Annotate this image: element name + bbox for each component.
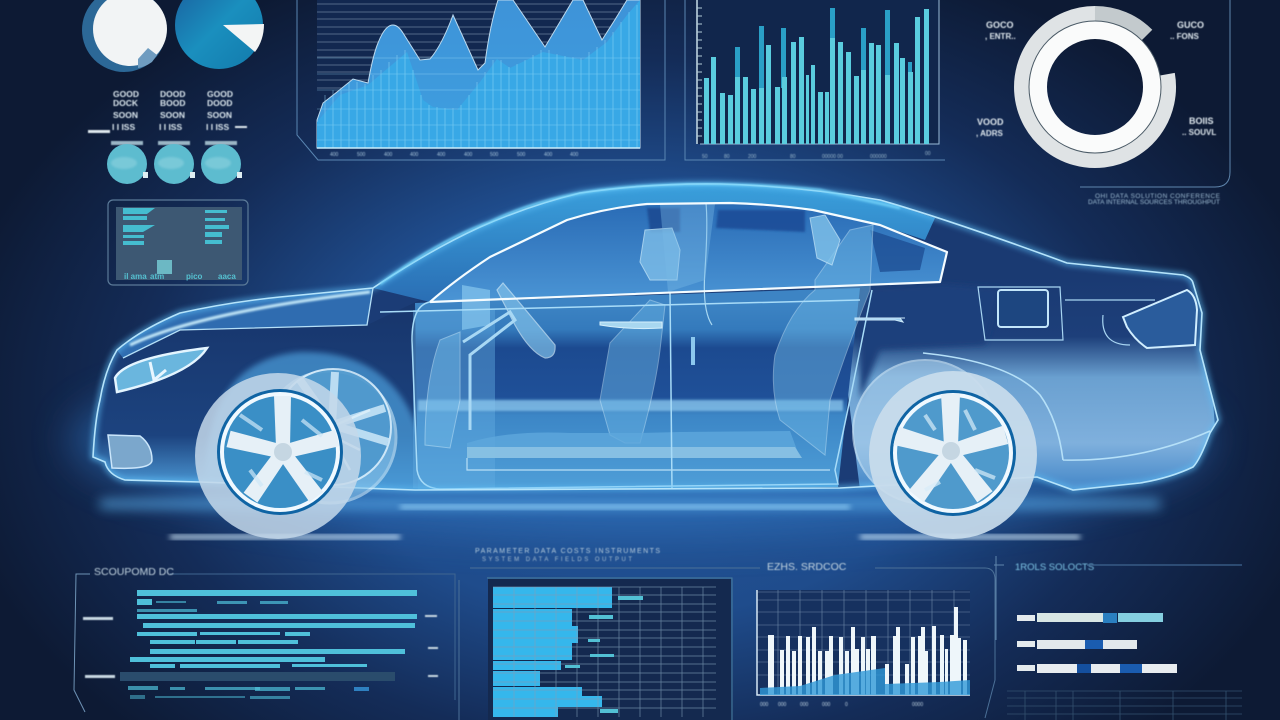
text: three-column labels above spheres: DOCK [113,98,139,108]
panel: small data screen: aaca [218,272,236,281]
chart: area chart: 400 [437,152,446,158]
text: three-column labels above spheres [88,89,247,145]
text: three-column labels above spheres: DOOD [160,89,186,99]
text: three-column labels above spheres: I I ISS [206,122,229,132]
ghost brake assembly [264,369,396,503]
text: three-column labels above spheres: SOON [113,110,138,120]
panel: filled bar chart: PARAMETER DATA COSTS INSTRUMENTS [475,548,660,555]
text: ring gauge labels: GOCO [986,20,1014,30]
front wheel [195,373,361,539]
panel: white and blue column chart: 000 [778,702,787,708]
frame and caption under ring gauge: DATA INTERNAL SOURCES THROUGHPUT [1088,199,1220,206]
panel: white and blue column chart: EZHS. SRDCOC [767,561,847,573]
panel: segmented progress bars: 1ROLS SOLOCTS [1015,562,1094,573]
panel: horizontal bar list [74,566,455,712]
icons: three teal spheres [107,144,242,184]
chart: area chart: 400 [330,152,339,158]
panel: white and blue column chart: 0 [845,702,848,708]
chart: area chart: 400 [464,152,473,158]
chart: bar chart top [685,0,945,160]
text: ring gauge labels: VOOD [977,117,1004,127]
text: ring gauge labels: .. SOUVL [1182,128,1216,137]
panel: white and blue column chart [757,561,995,718]
chart: top-left teal pie [175,0,264,69]
chart: top-left donut pie [82,0,167,72]
text: three-column labels above spheres: DOOD [207,98,232,108]
panel: white and blue column chart: 000 [800,702,809,708]
text: three-column labels above spheres: I I ISS [159,122,182,132]
text: ring gauge labels: .. FONS [1170,32,1200,41]
door panel [415,288,860,490]
upper rear and quarter panel [848,338,1215,490]
panel: white and blue column chart: 0000 [912,702,923,708]
panel: small data screen: pico [186,272,203,281]
chart: area chart: 400 [410,152,419,158]
chart: bar chart top: 200 [748,154,757,160]
chart: area chart: 400 [544,152,553,158]
chart: area chart: 500 [517,152,526,158]
chart: bar chart top: 00000 00 [822,154,843,160]
panel: horizontal bar list: SCOUPOMD DC [94,566,174,578]
panel: small data screen [108,200,248,285]
side glass [430,203,947,302]
text: three-column labels above spheres: I I ISS [112,122,135,132]
text: three-column labels above spheres: GOOD [113,89,139,99]
frame and caption under ring gauge [1080,0,1230,206]
chart: area chart [297,0,665,160]
seats and steering [425,203,873,455]
chart: bar chart top: 00 [925,151,931,157]
illustration: translucent car [70,180,1220,539]
text: ring gauge labels [976,20,1216,138]
glow beneath car [70,345,1210,539]
text: three-column labels above spheres: BOOD [160,98,186,108]
rear wheel assembly [853,360,1037,539]
chart: bar chart top: 80 [790,154,796,160]
door handle [855,318,905,322]
roof highlights [380,184,900,284]
chart: area chart: 500 [490,152,499,158]
text: ring gauge labels: BOIIS [1189,116,1214,126]
panel: white and blue column chart: 000 [822,702,831,708]
bumper line [923,353,1210,460]
tail light [1123,290,1197,348]
fuel door [978,287,1155,345]
chart: large ring gauge [1022,13,1169,160]
chart: bar chart top: 000000 [870,154,887,160]
chart: area chart: 400 [384,152,393,158]
car body fills [90,180,1220,500]
panel: small data screen: il ama [124,272,147,281]
white window line [430,203,947,302]
floor [467,337,830,470]
door lines [380,290,872,489]
hood band [117,288,373,358]
horizontal glow streak [418,400,843,411]
panel: filled bar chart: SYSTEM DATA FIELDS OUTPUT [482,557,632,563]
chart: bar chart top: 80 [724,154,730,160]
text: ring gauge labels: , ENTR.. [985,32,1016,41]
panel: small data screen: atm [150,272,164,281]
text: three-column labels above spheres: GOOD [207,89,233,99]
arch glow [205,352,418,490]
panel: segmented progress bars [994,556,1242,720]
text: three-column labels above spheres: SOON [160,110,185,120]
front fender [94,429,418,490]
text: ring gauge labels: GUCO [1177,20,1204,30]
chart: area chart: 400 [570,152,579,158]
body outline glow [93,184,1218,490]
panel: filled bar chart [459,548,760,720]
panel: white and blue column chart: 000 [760,702,769,708]
text: ring gauge labels: , ADRS [976,129,1003,138]
chart: bar chart top: 50 [702,154,708,160]
headlight [115,348,207,392]
roof band [373,184,935,302]
chart: area chart: 500 [357,152,366,158]
text: three-column labels above spheres: SOON [207,110,232,120]
frame and caption under ring gauge: OHI DATA SOLUTION CONFERENCE [1095,193,1221,200]
fog lamp [108,435,152,468]
